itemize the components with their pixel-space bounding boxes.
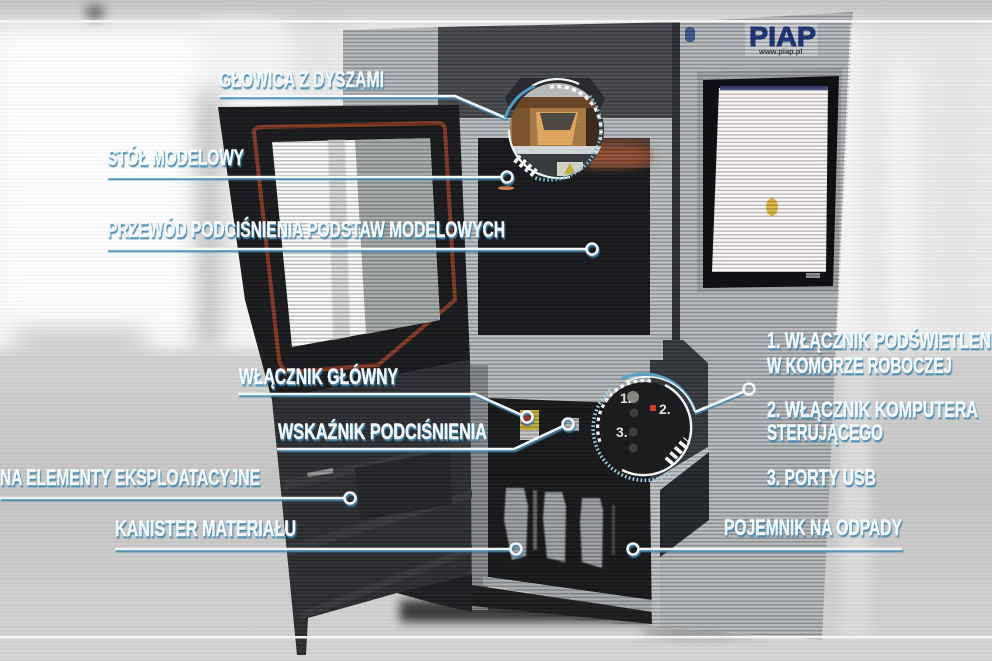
callout: Głowica z dyszami xyxy=(219,67,506,118)
label numbers: 2. xyxy=(659,401,671,417)
callout: Stół modelowy: STÓŁ MODELOWY xyxy=(107,145,244,170)
label numbers: 1. xyxy=(620,390,632,406)
callout: Pojemnik na odpady: POJEMNIK NA ODPADY xyxy=(724,515,902,540)
magnifier: control panel xyxy=(593,374,754,480)
legend: control panel items: STERUJĄCEGO xyxy=(767,420,883,445)
callout: elementy eksploatacyjne: NA ELEMENTY EKSPLOATACYJNE xyxy=(0,465,260,490)
callout: Przewód podciśnienia: PRZEWÓD PODCIŚNIENIA PODSTAW MODELOWYCH xyxy=(107,217,505,242)
door seal xyxy=(254,123,455,372)
cabinet body xyxy=(343,22,682,624)
logo: PIAP xyxy=(685,21,818,56)
connector dot xyxy=(744,384,754,394)
callout: Włącznik główny xyxy=(238,364,532,422)
callout: Głowica z dyszami: GŁOWICA Z DYSZAMI xyxy=(219,67,384,92)
vacuum gauge xyxy=(564,418,579,431)
callout: Pojemnik na odpady xyxy=(628,515,902,554)
main switch xyxy=(520,410,539,440)
logo: PIAP: www.piap.pl xyxy=(758,47,802,56)
door xyxy=(218,105,472,655)
material canisters xyxy=(504,488,615,568)
magnifier: print head xyxy=(505,78,610,184)
right panel xyxy=(650,12,853,640)
touchscreen xyxy=(697,68,842,292)
legend: control panel items xyxy=(767,328,992,490)
logo: PIAP: PIAP xyxy=(749,21,816,52)
ring: lower circle xyxy=(593,374,695,480)
machine: printer cabinet xyxy=(200,0,870,661)
callout: elementy eksploatacyjne xyxy=(0,465,356,504)
callout: Kanister materiału: KANISTER MATERIAŁU xyxy=(115,516,296,541)
label numbers xyxy=(616,390,671,440)
connector xyxy=(695,392,743,412)
callout: Wskaźnik podciśnienia: WSKAŹNIK PODCIŚNIENIA xyxy=(278,419,487,444)
scanlines on machine xyxy=(200,0,870,661)
ring: top circle xyxy=(505,79,601,180)
callout: Stół modelowy xyxy=(107,145,512,182)
callout: Włącznik główny: WŁĄCZNIK GŁÓWNY xyxy=(239,364,398,389)
callout: Kanister materiału xyxy=(115,516,522,554)
legend: control panel items: 3. PORTY USB xyxy=(767,465,876,490)
label numbers: 3. xyxy=(616,424,628,440)
door window xyxy=(272,138,440,347)
callout: Przewód podciśnienia xyxy=(107,217,598,254)
